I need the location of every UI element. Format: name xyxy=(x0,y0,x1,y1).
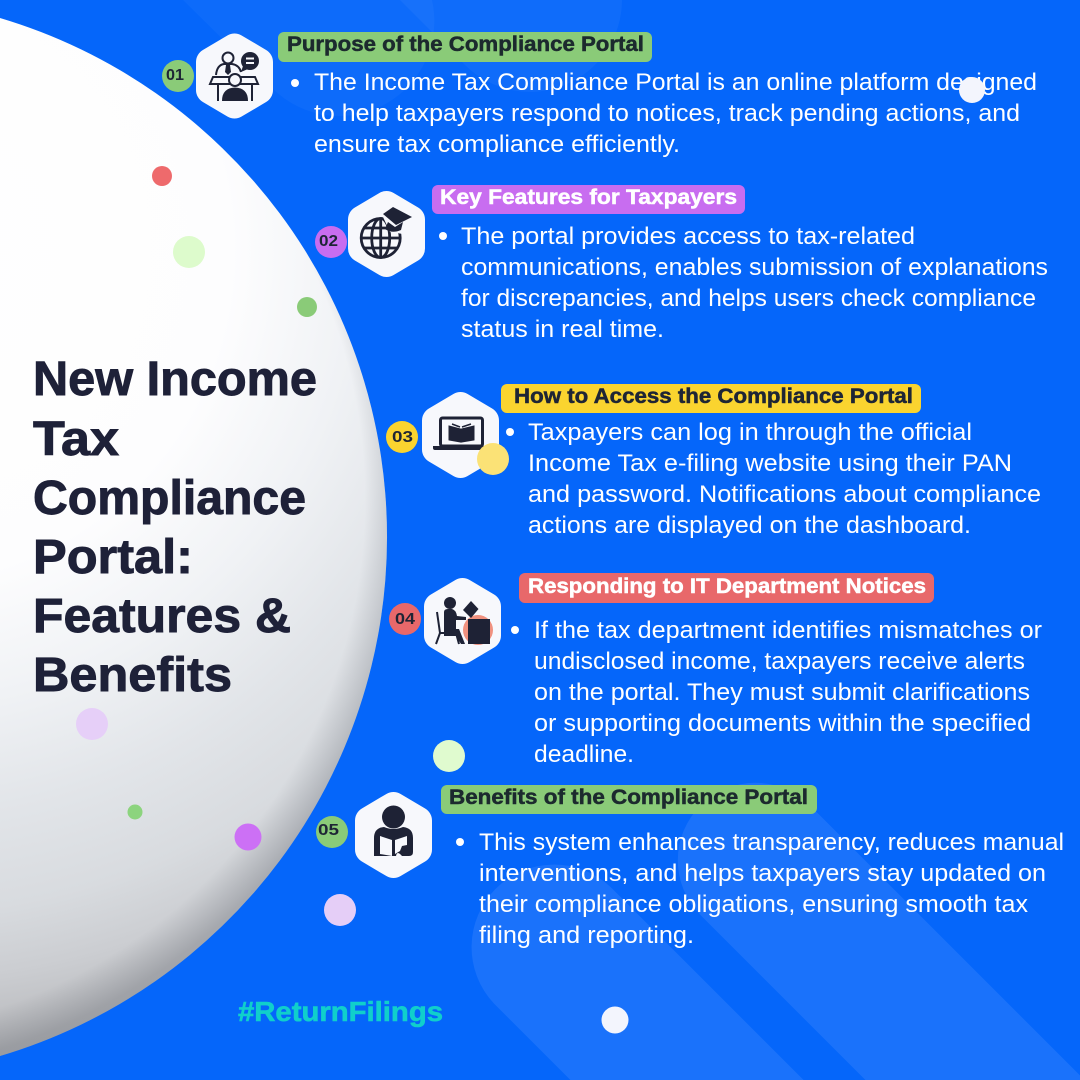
heading 03: How to Access the Compliance Portal xyxy=(514,385,913,408)
title xyxy=(33,353,317,702)
heading 02: Key Features for Taxpayers xyxy=(440,186,737,209)
heading 04: Responding to IT Department Notices xyxy=(528,575,926,598)
body text 01: ensure tax compliance efficiently. xyxy=(314,131,680,158)
heading 04 xyxy=(519,573,934,603)
title: Compliance xyxy=(33,472,306,525)
hashtag: #ReturnFilings xyxy=(238,996,443,1027)
body text 02: communications, enables submission of explanations xyxy=(461,254,1048,281)
number badge 04 xyxy=(389,603,421,635)
title: Benefits xyxy=(33,649,232,702)
heading 01: Purpose of the Compliance Portal xyxy=(287,33,644,56)
body text 03: Taxpayers can log in through the official xyxy=(528,419,972,446)
body text 02: The portal provides access to tax-related xyxy=(461,223,915,250)
number badge 01: 01 xyxy=(166,67,184,84)
white dot over text xyxy=(959,77,985,103)
body text 04: undisclosed income, taxpayers receive alerts xyxy=(534,648,1025,675)
number badge 02: 02 xyxy=(319,233,338,250)
number badge 03 xyxy=(386,421,418,453)
number badge 04: 04 xyxy=(395,611,415,628)
number badge 03: 03 xyxy=(392,429,413,446)
section 01: purpose xyxy=(162,32,1037,158)
section 02: key features xyxy=(315,185,1048,343)
body text 03: actions are displayed on the dashboard. xyxy=(528,512,971,539)
heading 05: Benefits of the Compliance Portal xyxy=(449,786,808,809)
lilac dot xyxy=(324,894,356,926)
heading 02 xyxy=(432,185,745,214)
body text 02: status in real time. xyxy=(461,316,664,343)
body text 05: their compliance obligations, ensuring smooth tax xyxy=(479,891,1028,918)
section 05: benefits xyxy=(316,785,1064,949)
body text 05: This system enhances transparency, reduces manual xyxy=(479,829,1064,856)
body text 01: The Income Tax Compliance Portal is an online platform designed xyxy=(314,69,1037,96)
body text 03: and password. Notifications about compliance xyxy=(528,481,1041,508)
white dot xyxy=(602,1006,628,1034)
title: Portal: xyxy=(33,531,193,584)
body text 03 xyxy=(506,419,1041,539)
body text 04: If the tax department identifies mismatches or xyxy=(534,617,1042,644)
body text 04 xyxy=(511,617,1042,768)
icon: person reading xyxy=(369,806,418,864)
body text 05: filing and reporting. xyxy=(479,922,694,949)
light green dot xyxy=(433,740,465,772)
body text 04: deadline. xyxy=(534,741,634,768)
body text 01: to help taxpayers respond to notices, track pending actions, and xyxy=(314,100,1020,127)
decorative dots on sphere xyxy=(76,166,317,850)
body text 04: on the portal. They must submit clarifications xyxy=(534,679,1030,706)
icon: globe with graduation cap xyxy=(361,204,414,263)
number badge 05 xyxy=(316,816,348,848)
title: Tax xyxy=(33,413,119,466)
icon: person at desk xyxy=(436,592,493,650)
number badge 05: 05 xyxy=(318,822,339,839)
body text 02: for discrepancies, and helps users check compliance xyxy=(461,285,1036,312)
icon: laptop with book xyxy=(433,406,489,464)
body text 03: Income Tax e-filing website using their PAN xyxy=(528,450,1012,477)
section 03: how to access xyxy=(386,384,1041,539)
yellow dot xyxy=(477,443,509,475)
white sphere xyxy=(0,18,387,1056)
body text 05 xyxy=(456,829,1064,949)
body text 04: or supporting documents within the specified xyxy=(534,710,1031,737)
body text 02 xyxy=(439,223,1048,343)
section 04: responding to notices xyxy=(389,573,1042,768)
title: New Income xyxy=(33,353,317,406)
number badge 02 xyxy=(315,226,347,258)
body text 05: interventions, and helps taxpayers stay updated on xyxy=(479,860,1046,887)
number badge 01 xyxy=(162,60,194,92)
title: Features & xyxy=(33,590,291,643)
body text 01 xyxy=(291,69,1037,158)
icon: teacher and student xyxy=(210,48,259,104)
heading 01 xyxy=(278,32,652,62)
